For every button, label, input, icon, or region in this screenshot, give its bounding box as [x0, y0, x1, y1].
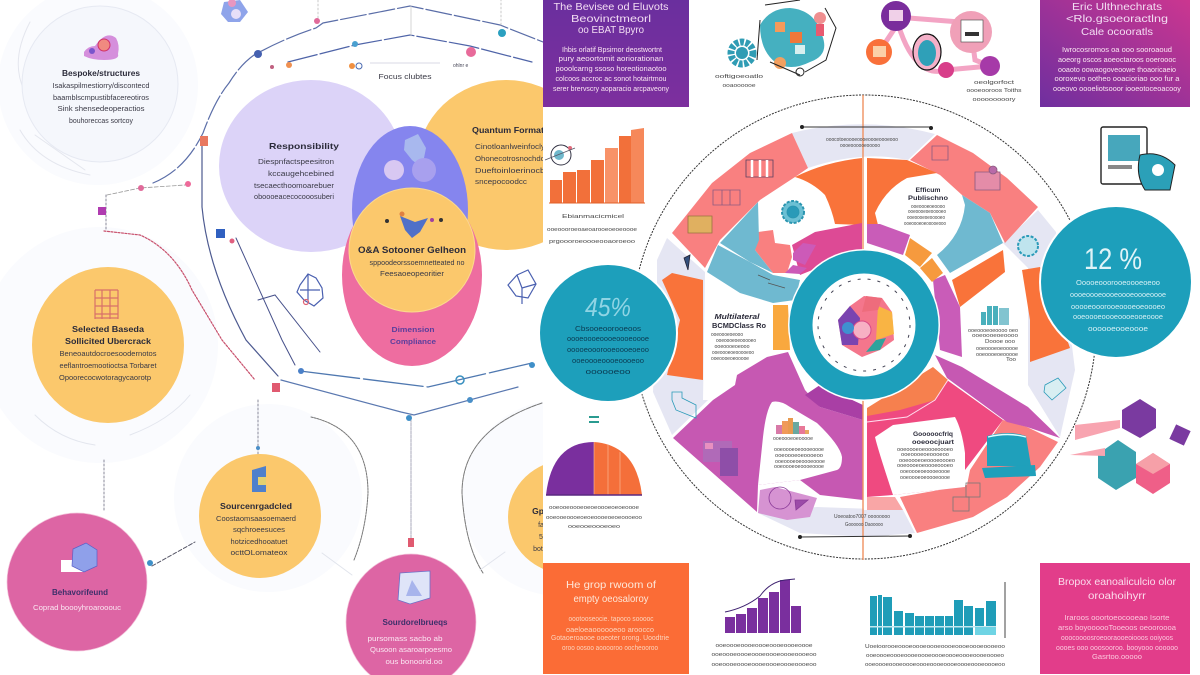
icon cluster: top nodes — [866, 1, 1000, 78]
stat text: ooeoooeoooeoooeoo — [572, 358, 644, 365]
icon: hex cluster top — [221, 0, 248, 22]
body: ooroxevo ootheo ooacioriao ooo fur a — [1054, 76, 1180, 83]
top circle — [22, 6, 178, 162]
blob text right: ooeoooeoeooooe — [976, 352, 1018, 358]
white blob lower left — [758, 402, 842, 485]
dome caption: ooeooeoooeoeoeoooeoeoeoooe — [549, 505, 639, 511]
stat text — [567, 326, 649, 376]
yellow body: Dueftoinloerinocb — [475, 168, 545, 175]
icon: hex clusters — [384, 134, 436, 182]
lilac blob — [758, 487, 817, 520]
heading: Eric Ulthnechrats — [1072, 2, 1162, 13]
stat text: oooooeooeoooe — [1088, 326, 1148, 333]
stat circle: left — [538, 263, 678, 403]
icon: grid — [95, 290, 118, 319]
right yellow clipped circle — [508, 460, 628, 574]
panel: central wheel — [632, 95, 1096, 560]
blob text right: ooeoooeoeoooo — [972, 333, 1018, 339]
icon: teal bars right — [981, 306, 1009, 325]
salmon segments — [672, 133, 1058, 533]
blob text top right: Publischno — [908, 195, 948, 202]
icon: teal ship — [672, 392, 696, 418]
icon cluster: top gears — [731, 0, 836, 76]
teal chart caption — [865, 644, 1005, 668]
left network panel — [6, 0, 543, 675]
stat circle: right — [1039, 205, 1193, 359]
pink body: Qusoon asaroarpoesmo — [370, 647, 452, 654]
lavender body: Diespnfactspeesitron — [258, 159, 334, 166]
centre lines — [863, 95, 866, 560]
pink body: Coprad boooyhroarooouc — [33, 605, 122, 612]
blob text top right: ooeoooeoeoooo — [911, 204, 945, 210]
icon: lilac machine — [769, 487, 808, 510]
body: arso boyoooooTooeoos oeooroooa — [1058, 625, 1176, 632]
icon: outline molecule right — [508, 270, 536, 304]
dome caption: ooeooeoooeoeo — [568, 524, 620, 530]
pink body: pursomass sacbo ab — [368, 636, 443, 643]
body: Gotaoeroaooe ooeoter orong. Uoodtrie — [551, 635, 669, 642]
purple chart caption: ooeoooeoooeoooeoooeoooeoooe — [716, 643, 813, 649]
blob text left: ooeoooeoeooooeo — [716, 338, 756, 344]
staircase caption: prgoooroeoooeooaoroeoo — [549, 239, 635, 245]
heading: He grop rwoom of — [566, 580, 656, 591]
pink ellipse — [342, 220, 482, 366]
caption mark — [349, 63, 469, 69]
left yellow circle: Sollicited Ubercrack — [65, 336, 151, 346]
half dome chart — [546, 416, 642, 495]
gear caption — [715, 74, 763, 89]
heading: Bropox eanoaliculcio olor — [1058, 577, 1177, 588]
icon: outline molecule left — [297, 274, 323, 306]
orange segments — [662, 158, 1070, 380]
icon: hub mosaic — [838, 296, 894, 357]
blob text lower right: ooeoooeoeoooeoo — [901, 452, 949, 458]
panel: purple header left — [543, 0, 689, 107]
dotted inner ring — [818, 279, 910, 371]
circle body: baamblscmpustibfacereotiros — [53, 95, 150, 102]
lavender circle — [219, 80, 403, 252]
icon: grey blocks — [953, 483, 980, 511]
left body: eeflantroemootioctsa Torbaret — [60, 363, 157, 370]
nodes caption: oeolgorfoct — [974, 80, 1015, 86]
icon: hexagon cubes — [1070, 399, 1191, 494]
center yellow ellipse — [349, 188, 475, 312]
body: Ihbis orlatif Bpsirnor deostwortnt — [562, 47, 662, 54]
blob text lower right: ooeoocjuart — [912, 439, 955, 446]
blob text left — [711, 314, 766, 362]
heading — [554, 2, 668, 36]
staircase caption — [547, 214, 637, 245]
panel: purple header right — [1040, 0, 1190, 107]
dark orchid arc — [805, 385, 863, 420]
top segment text — [826, 137, 898, 149]
lavender body — [254, 159, 335, 201]
caption mark: ohlnr e — [453, 63, 469, 69]
body: Gasrtoo.ooooo — [1092, 654, 1142, 661]
middle body: octtOLomateox — [230, 550, 288, 557]
stat text: Cbsooeoorooeoos — [575, 326, 642, 333]
left yellow circle — [32, 267, 184, 423]
icon: cube — [61, 543, 97, 572]
clipped labels: 5 — [539, 534, 543, 541]
yellow body: sncepocoodcc — [475, 179, 528, 186]
blob text right: ooeoooeoeoooo oeo — [968, 328, 1018, 334]
teal bar chart — [870, 582, 1005, 638]
pink circle bottom left — [7, 513, 147, 651]
circle heading: Bespoke/structures — [62, 68, 140, 78]
body: oooes ooo ooosooroo. booyooo oooooo — [1056, 645, 1178, 652]
top caption: Focus clubtes — [378, 74, 432, 81]
purple chart caption: ooeoooeoooeoooeoooeoooeoooeoo — [712, 662, 817, 668]
icon: bars purple — [776, 418, 809, 434]
small orange tiles — [773, 238, 943, 350]
body: Iraroos ooortoeocooeao Isorte — [1064, 615, 1170, 622]
center body — [370, 260, 465, 278]
icon: network — [385, 212, 443, 238]
icon: device top right — [1101, 127, 1175, 190]
blob text right: Doooe ooo — [985, 339, 1015, 345]
orchid segments — [673, 352, 1060, 512]
teal chart caption: ooeoooeoooeoooeoooeoooeoooeoooeoooeoooeo — [866, 653, 1004, 659]
pink heading: Behavorifeund — [52, 588, 108, 597]
gear caption: ooaoooooe — [722, 83, 756, 89]
stat text: ooooeooorooeoooeoeoooeo — [1071, 304, 1165, 311]
body: serer brervscry aoparacio arcpaveony — [553, 86, 669, 93]
circle body: Isakaspilmestiorry/discontecd — [52, 83, 150, 90]
body: oroo oosoo aooooroo oocheooroo — [562, 645, 658, 652]
middle body: sqchroeesuces — [233, 527, 286, 534]
left body — [59, 351, 157, 382]
connector lines — [18, 0, 543, 575]
body: aoeorg oscos aoeoctaroos ooeroooc — [1058, 57, 1177, 64]
icon: bars in salmon — [746, 160, 773, 177]
pink caption: Dimension — [392, 325, 435, 334]
clipped labels: fa — [538, 522, 544, 529]
pink body: ous bonoorid.oo — [386, 659, 443, 666]
body: colcoos accroc ac sonot hotairtmou — [556, 76, 667, 83]
circle body — [52, 83, 150, 125]
body: oootooseocie. tapoco sooooc — [568, 616, 654, 623]
left heading: Selected Baseda — [72, 324, 144, 334]
clipped labels — [532, 506, 544, 553]
blob text lower left: ooeoooeoeoooeoo — [775, 453, 823, 459]
staircase caption: Ebianmacicmicel — [562, 214, 624, 220]
heading — [566, 580, 656, 605]
lavender body: tsecaecthoomoarebuer — [254, 183, 335, 190]
blob text left: ooeoooeoeooooe — [711, 356, 749, 362]
pink heading: Sourdorelbrueqs — [382, 618, 448, 627]
purple chart caption: ooeoooeoooeoooeoooeoooeoooeoo — [712, 652, 817, 658]
blob text lower left: ooeoooeoeoooeoooe — [775, 459, 825, 465]
icon: book — [252, 466, 266, 492]
blob text lower right: ooeoooeoeoooeoooe — [900, 469, 950, 475]
body — [1056, 615, 1178, 661]
top segment text: ooocotoeoooeoooeoooeoooeooo — [826, 137, 898, 143]
circle body: bouhoreccas sortcoy — [69, 118, 133, 125]
pink body — [368, 636, 452, 666]
red segment — [867, 380, 1003, 497]
teal ring — [788, 249, 940, 401]
black bracket bottom — [798, 534, 912, 539]
teal chart caption: Uoeioorooeoooeoooeoooeoooeoooeoooeoooeoo — [865, 644, 1005, 650]
nodes caption: ooooooooory — [972, 97, 1016, 103]
body: pooolcarng ssoso horeotionaotoo — [556, 66, 667, 73]
yellow body: Ohonecotrosnochdo — [475, 156, 545, 163]
blob text lower left: ooeoooeoeoooeoooe — [774, 447, 824, 453]
blob text left: ooeoooeoeooooeoo — [712, 350, 754, 356]
connector nodes — [98, 18, 535, 566]
blob text top right — [904, 187, 948, 227]
icon: yellow building — [688, 216, 712, 233]
icon: diamonds right — [1044, 378, 1066, 400]
middle body — [216, 516, 296, 557]
purple bar chart — [725, 579, 801, 633]
nodes caption: oooeooroos Toiths — [966, 88, 1022, 94]
stat text: oooeoooeoooeoooeoooe — [567, 336, 649, 343]
stat value: 12 % — [1084, 243, 1142, 276]
icon: ring bit — [758, 275, 785, 288]
icon: purple cell — [84, 35, 119, 60]
blob text left: ooeoooeoeooo — [711, 332, 743, 338]
staircase chart — [545, 128, 645, 203]
purple chart caption — [712, 643, 817, 668]
teal chart caption: ooeoooeoooeoooeoooeoooeoooeoooeoooeoooeoo — [865, 662, 1005, 668]
stat text: Ooooeooorooeoooeoeoo — [1076, 280, 1160, 287]
blob text lower right: ooeoooeoeoooeoooeo — [899, 458, 955, 464]
middle body: Coostaomsaasoemaerd — [216, 516, 296, 523]
heading: Beovinctmeorl — [571, 14, 651, 25]
teal segments — [707, 195, 1003, 303]
panel: pink footer — [1040, 563, 1190, 674]
yellow body — [475, 144, 546, 186]
icon: teal badge — [1018, 236, 1038, 256]
blob text top right: ooeoooeoeooooeo — [908, 209, 946, 215]
right yellow circle — [425, 80, 543, 250]
bottom segment text: Goooooo Daooooo — [845, 522, 883, 528]
blob text top right: Efficum — [916, 187, 941, 194]
blob text lower right: ooeoooeoeoooeoooeo — [897, 463, 953, 469]
body: oaeloeaoooooeoo aroocco — [566, 627, 654, 634]
blob text lower right: Gooooocfrlq — [913, 431, 953, 438]
blob text lower right: ooeoooeoeoooeoooeo — [897, 447, 953, 453]
stat text: ooeoooeoooeoooeooeoooe — [1073, 314, 1163, 321]
blob text top right: ooeoooeoeooooeooo — [904, 221, 946, 227]
body — [551, 616, 669, 652]
orange under ring — [867, 367, 948, 416]
icon: navy tool — [684, 255, 690, 270]
body: pury aeoortomit aoriorationan — [558, 56, 664, 63]
magenta arc segments — [785, 223, 962, 357]
heading: empty oeosaloroy — [574, 594, 648, 605]
outer dotted ring — [632, 95, 1096, 559]
body: Iwrocosromos oa ooo sooroaoud — [1062, 47, 1172, 54]
blob text top right: ooeoooeoeooooeo — [907, 215, 945, 221]
white blob lower right — [875, 417, 965, 495]
dome caption: ooeooeoooeoeoeoooeoeoeoooeoo — [546, 515, 642, 521]
blob text left: Multilateral — [714, 314, 761, 321]
gear caption: ooftigoeoatlo — [715, 74, 763, 80]
white right background — [543, 0, 1200, 675]
blob text right — [968, 328, 1018, 363]
center heading: O&A Sotooner Gelheon — [358, 245, 466, 255]
pink circle bottom centre — [346, 554, 476, 675]
yellow heading: Quantum Format — [472, 125, 544, 135]
yellow body: Cinotloanlweinfocly — [475, 144, 546, 151]
heading: The Bevisee od Eluvots — [554, 2, 668, 13]
staircase caption: ooeoooroeoaeoarooeoeoeoooe — [547, 227, 637, 233]
blob text lower left: ooeoooeoeooooe — [773, 436, 813, 442]
nodes caption — [966, 80, 1022, 103]
lavender heading: Responsibility — [269, 141, 339, 151]
blob text lower left: ooeoooeoeoooeoooe — [774, 464, 824, 470]
lavender body: kccaugehcebined — [268, 171, 334, 178]
body — [1053, 47, 1182, 93]
pink ellipse: Compliance — [390, 337, 436, 346]
blob text left: BCMDClass Ro — [712, 323, 766, 330]
dome caption — [546, 505, 642, 530]
heading: oo EBAT Bpyro — [578, 25, 644, 36]
lavender body: oboooeacecocooosuberi — [254, 194, 334, 201]
heading: Cale ocooratls — [1081, 27, 1153, 38]
top segment text: oooeoooooeooooo — [840, 143, 880, 149]
heading: oroahoihyrr — [1088, 591, 1147, 602]
clipped labels: bot — [533, 546, 543, 553]
body: ooeovo oooeliotsooor iooeotoceoacooy — [1053, 86, 1182, 93]
heading: <Rlo.gsoeoractlng — [1066, 14, 1168, 25]
stat text: oooooeoo — [586, 369, 631, 376]
light salmon chip — [867, 497, 903, 510]
center body: sppoodeorssoemnetteated no — [370, 260, 465, 267]
body — [553, 47, 669, 93]
icon: teal gear — [782, 201, 804, 223]
panel: orange footer — [543, 563, 689, 674]
black bracket top — [800, 125, 933, 130]
blob text right: ooeoooeoeooooe — [976, 346, 1018, 352]
icon: lilac tiles — [703, 441, 738, 476]
icon: screen — [398, 571, 430, 604]
bottom segment text: Uoeoatoo7007 oooooooo — [834, 514, 890, 520]
body: ooocoooosroeooraooeoiooos ooiyoos — [1061, 635, 1173, 642]
middle yellow circle — [199, 454, 321, 578]
icon: boxes top right — [932, 146, 1000, 190]
clipped labels: Gp — [532, 506, 544, 516]
stat text: ooooeooorooeoooeoeoo — [567, 347, 649, 354]
halo circles — [0, 0, 658, 596]
heading — [1066, 2, 1168, 38]
heading — [1058, 577, 1177, 602]
icon: outline box — [713, 190, 740, 205]
blob text right: Too — [1006, 357, 1016, 363]
blob text lower right — [897, 431, 955, 481]
segment icons — [672, 146, 1066, 511]
stat text: oooeoooeoooeoooeoooeoooe — [1070, 292, 1166, 299]
white arc under ring — [867, 380, 948, 422]
grey segments — [653, 124, 1075, 537]
stat text — [1070, 280, 1166, 333]
middle body: hotzicedhooatuet — [230, 539, 288, 546]
icon: teal printer — [982, 433, 1036, 478]
center body: Feesaoeopeoritier — [380, 271, 445, 278]
body: ooaoto oowaogoveoowe thoaoricaeio — [1058, 67, 1176, 74]
blue ellipse — [352, 126, 468, 227]
left body: Opoorecocwotoragycaorotp — [59, 375, 151, 382]
middle heading: Sourcenrgadcled — [220, 501, 292, 511]
circle body: Sink shensedeoperactios — [58, 106, 145, 113]
bottom segment text — [834, 514, 890, 528]
stat value: 45% — [585, 292, 631, 322]
blob text left: ooeoooeoeooo — [714, 344, 750, 350]
blob text lower left — [773, 436, 825, 470]
left body: Beneoautdocroesoodernotos — [60, 351, 157, 358]
blob text lower right: ooeoooeoeoooeoooe — [900, 475, 950, 481]
